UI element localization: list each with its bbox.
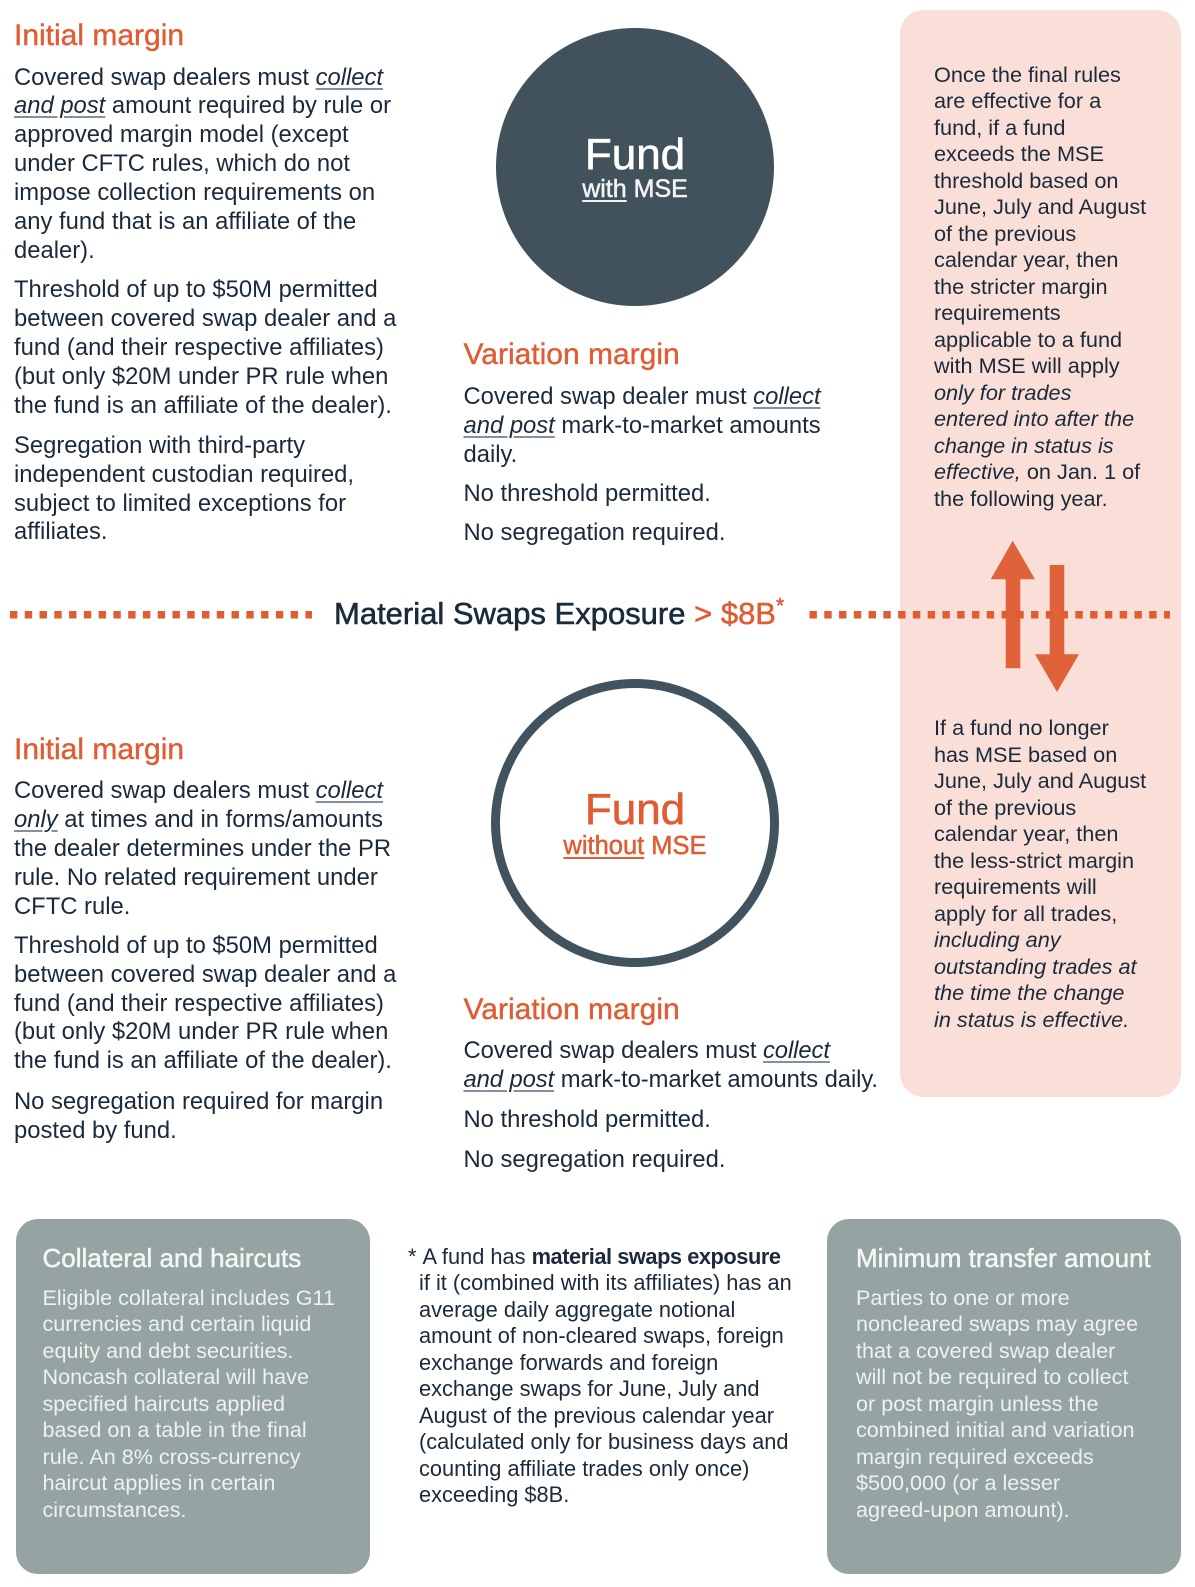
- heading: Variation margin: [464, 993, 680, 1026]
- label: Fund: [585, 130, 685, 179]
- circle: fund with MSE: [496, 28, 774, 306]
- text: currencies and certain liquid: [42, 1311, 311, 1336]
- paragraph: [14, 1088, 383, 1144]
- paragraph: dealer).: [14, 237, 95, 264]
- text: when fund exceeds MSE: Once the final rules: [934, 62, 1121, 87]
- panel: MSE status change: [900, 10, 1181, 1097]
- paragraph: [14, 276, 396, 419]
- text: when fund exceeds MSE: June, July and August: [934, 194, 1146, 219]
- paragraph: between covered swap dealer and a: [14, 305, 396, 332]
- paragraph: Covered swap dealers must collect: [14, 777, 383, 804]
- heading: Initial margin: [14, 733, 184, 766]
- paragraph: and post mark-to-market amounts daily.: [464, 1066, 878, 1093]
- paragraph: any fund that is an affiliate of the: [14, 208, 356, 235]
- paragraph: Threshold of up to $50M permitted: [14, 276, 378, 303]
- paragraph: and post amount required by rule or: [14, 92, 391, 119]
- text: Parties to one or more: [856, 1285, 1070, 1310]
- text: will not be required to collect: [856, 1364, 1128, 1389]
- paragraph: the dealer determines under the PR: [14, 835, 391, 862]
- circle: fund without MSE: [491, 679, 779, 967]
- heading: Collateral and haircuts: [42, 1243, 301, 1273]
- heading: Minimum transfer amount: [856, 1243, 1151, 1273]
- paragraph: (but only $20M under PR rule when: [14, 363, 388, 390]
- footnote: material swaps exposure definition: if it (combined with its affiliates) has an: [419, 1270, 792, 1295]
- text: haircut applies in certain: [42, 1470, 275, 1495]
- text: [856, 1285, 1138, 1522]
- text: when fund exceeds MSE: change in status is: [934, 433, 1114, 458]
- footnote: material swaps exposure definition: exceeding $8B.: [419, 1482, 569, 1507]
- footnote: material swaps exposure definition: (calculated only for business days and: [419, 1429, 789, 1454]
- paragraph: posted by fund.: [14, 1116, 177, 1144]
- text: Eligible collateral includes G11: [42, 1285, 335, 1310]
- sublabel: with MSE: [582, 175, 688, 203]
- paragraph: Covered swap dealers must collect: [14, 64, 383, 90]
- footnote: material swaps exposure definition: amount of non-cleared swaps, foreign: [419, 1323, 784, 1348]
- paragraph: Covered swap dealer must collect: [464, 383, 821, 410]
- sublabel: without MSE: [563, 832, 707, 860]
- text: when fund exceeds MSE: [934, 62, 1146, 511]
- text: margin required exceeds: [856, 1444, 1094, 1469]
- text: when fund exceeds MSE: effective, on Jan. 1 of: [934, 459, 1140, 484]
- footnote: material swaps exposure definition: exchange forwards and foreign: [419, 1350, 718, 1374]
- text: rule. An 8% cross-currency: [42, 1444, 301, 1469]
- paragraph: (but only $20M under PR rule when: [14, 1018, 388, 1045]
- text: when fund no longer has MSE: calendar year, then: [934, 821, 1118, 846]
- text: when fund no longer has MSE: the less-strict margin: [934, 848, 1134, 872]
- paragraph: [14, 777, 391, 920]
- paragraph: No segregation required for margin: [14, 1088, 383, 1115]
- text: noncleared swaps may agree: [856, 1311, 1138, 1336]
- text: when fund exceeds MSE: fund, if a fund: [934, 115, 1065, 140]
- paragraph: [14, 432, 354, 545]
- heading: material swaps exposure: Material Swaps Exposure > $8B*: [334, 595, 784, 631]
- text: that a covered swap dealer: [856, 1338, 1115, 1363]
- text: when fund exceeds MSE: the stricter margin: [934, 274, 1108, 299]
- paragraph: No segregation required.: [464, 519, 725, 546]
- text: when fund exceeds MSE: calendar year, then: [934, 247, 1118, 272]
- lower-left: initial margin for fund without MSE: [14, 733, 396, 1144]
- paragraph: No threshold permitted.: [464, 1106, 711, 1133]
- text: when fund no longer has MSE: including any: [934, 927, 1061, 952]
- text: when fund no longer has MSE: has MSE based on: [934, 742, 1117, 766]
- lower-middle: variation margin: [463, 993, 878, 1172]
- footnote: material swaps exposure definition: [408, 1244, 792, 1507]
- text: specified haircuts applied: [42, 1391, 285, 1416]
- paragraph: the fund is an affiliate of the dealer).: [14, 392, 392, 419]
- footnote: material swaps exposure definition: average daily aggregate notional: [419, 1296, 735, 1322]
- text: equity and debt securities.: [42, 1338, 293, 1363]
- text: when fund no longer has MSE: If a fund no longer: [934, 715, 1109, 740]
- text: when fund exceeds MSE: only for trades: [934, 380, 1071, 405]
- text: when fund exceeds MSE: are effective for a: [934, 88, 1101, 113]
- paragraph: CFTC rule.: [14, 893, 130, 920]
- paragraph: approved margin model (except: [14, 121, 349, 148]
- panel: collateral and haircuts: [16, 1219, 370, 1574]
- paragraph: Covered swap dealers must collect: [464, 1037, 830, 1064]
- text: when fund exceeds MSE: applicable to a fund: [934, 327, 1122, 352]
- text: when fund exceeds MSE: entered into after the: [934, 406, 1134, 431]
- paragraph: daily.: [464, 441, 517, 468]
- paragraph: Segregation with third-party: [14, 432, 305, 459]
- paragraph: fund (and their respective affiliates): [14, 990, 384, 1016]
- paragraph: the fund is an affiliate of the dealer).: [14, 1047, 392, 1074]
- paragraph: [14, 64, 391, 264]
- paragraph: impose collection requirements on: [14, 179, 375, 206]
- heading: Variation margin: [464, 338, 680, 371]
- text: circumstances.: [42, 1497, 186, 1522]
- paragraph: subject to limited exceptions for: [14, 490, 346, 516]
- text: when fund exceeds MSE: with MSE will apply: [934, 353, 1120, 378]
- paragraph: [464, 383, 822, 468]
- paragraph: Threshold of up to $50M permitted: [14, 932, 378, 959]
- paragraph: between covered swap dealer and a: [14, 961, 396, 988]
- paragraph: [14, 932, 396, 1074]
- footnote: material swaps exposure definition: counting affiliate trades only once): [419, 1456, 749, 1480]
- paragraph: No threshold permitted.: [464, 480, 711, 507]
- paragraph: under CFTC rules, which do not: [14, 150, 350, 177]
- text: when fund no longer has MSE: June, July and August: [934, 768, 1146, 793]
- footnote: material swaps exposure definition: * A fund has material swaps exposure: [408, 1244, 781, 1268]
- text: when fund no longer has MSE: outstanding trades at: [934, 954, 1137, 978]
- text: when fund no longer has MSE: in status is effective.: [934, 1006, 1129, 1032]
- paragraph: only at times and in forms/amounts: [14, 806, 383, 833]
- panel: minimum transfer amount: [827, 1219, 1181, 1574]
- text: or post margin unless the: [856, 1391, 1098, 1416]
- upper-middle: variation margin: [463, 338, 822, 546]
- text: when fund no longer has MSE: [934, 715, 1146, 1032]
- text: when fund exceeds MSE: the following year.: [934, 486, 1108, 511]
- text: when fund exceeds MSE: threshold based on: [934, 168, 1118, 193]
- text: when fund no longer has MSE: apply for all trades,: [934, 900, 1117, 926]
- text: when fund no longer has MSE: the time the change: [934, 980, 1124, 1005]
- text: when fund exceeds MSE: of the previous: [934, 221, 1076, 246]
- label: Fund: [585, 785, 685, 834]
- upper-left: initial margin for fund with MSE: [14, 19, 396, 545]
- paragraph: rule. No related requirement under: [14, 864, 378, 891]
- text: [42, 1285, 335, 1522]
- paragraph: fund (and their respective affiliates): [14, 334, 384, 361]
- text: Noncash collateral will have: [42, 1364, 309, 1389]
- text: based on a table in the final: [42, 1417, 307, 1442]
- paragraph: independent custodian required,: [14, 461, 354, 488]
- footnote: material swaps exposure definition: August of the previous calendar year: [419, 1402, 774, 1428]
- text: agreed-upon amount).: [856, 1497, 1070, 1522]
- paragraph: [464, 1037, 878, 1093]
- paragraph: and post mark-to-market amounts: [464, 412, 821, 439]
- paragraph: No segregation required.: [464, 1146, 725, 1172]
- text: when fund no longer has MSE: of the previous: [934, 794, 1076, 820]
- text: when fund exceeds MSE: exceeds the MSE: [934, 141, 1104, 166]
- paragraph: affiliates.: [14, 518, 107, 545]
- text: when fund no longer has MSE: requirements will: [934, 874, 1097, 899]
- heading: Initial margin: [14, 19, 184, 52]
- text: combined initial and variation: [856, 1417, 1134, 1442]
- text: when fund exceeds MSE: requirements: [934, 300, 1061, 325]
- text: $500,000 (or a lesser: [856, 1470, 1060, 1495]
- footnote: material swaps exposure definition: exchange swaps for June, July and: [419, 1376, 759, 1401]
